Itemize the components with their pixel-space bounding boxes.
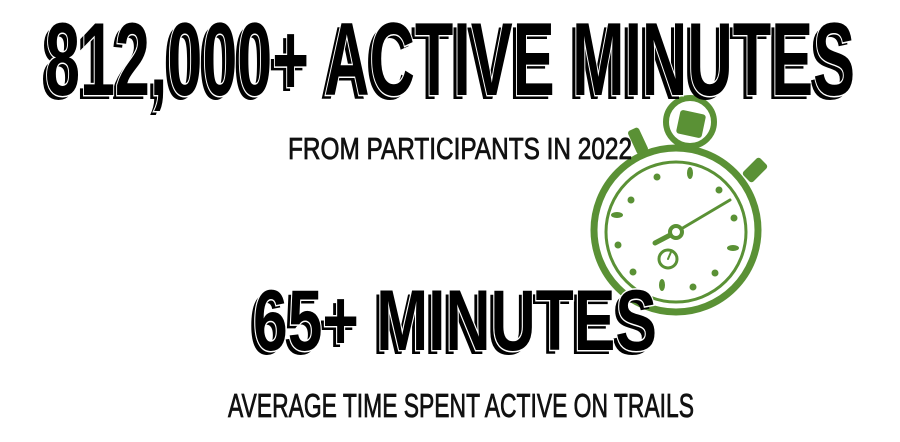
subtitle: average time: AVERAGE TIME SPENT ACTIVE ON TRAILS [228,387,694,424]
heading: 65+ minutes: 65+ MINUTES [253,273,657,369]
icon: stopwatch [594,98,768,312]
subtitle: from participants: FROM PARTICIPANTS IN 2022 [288,131,632,166]
heading: 65+ minutes: 65+ MINUTES [249,277,653,373]
